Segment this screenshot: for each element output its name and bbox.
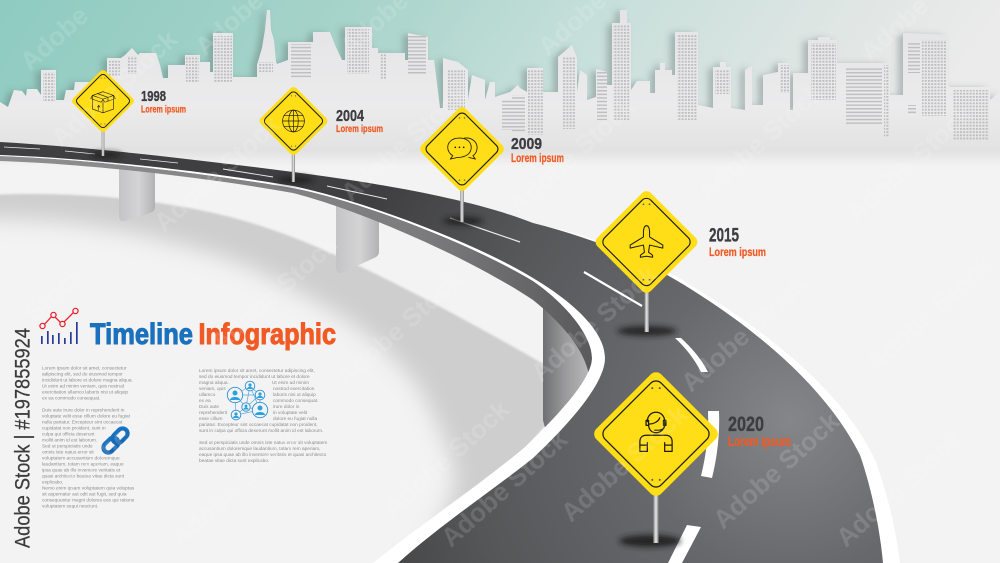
text column right: Sed ut perspiciatis unde omnis iste natus error sit voluptatem: [199, 440, 327, 446]
label 2004: 2004: [336, 108, 364, 125]
label 2009: [511, 136, 564, 165]
sign 1998: [71, 69, 135, 158]
text column right: magna aliqua.: [199, 380, 229, 386]
text column right: accusantium doloremque laudantium, totam rem aperiam,: [199, 446, 320, 452]
text column left: incididunt ut labore et dolore magna aliqua.: [42, 378, 133, 384]
road cast shadow on ground: [0, 194, 600, 563]
ground background: [0, 165, 1000, 563]
text column right: eaque ipsa quae ab illo inventore veritatis et quasi architecto: [199, 452, 327, 458]
watermarks: Adobe Stock: [55, 369, 193, 498]
text column left: ex ea commodo consequat.: [42, 396, 100, 402]
text column right: ullamco: [199, 392, 216, 398]
text column right: reprehenderit: [199, 410, 228, 416]
sign 2020: [591, 369, 721, 547]
watermarks: Adobe Stock: [525, 259, 663, 388]
text column right: commodo consequat.: [273, 398, 318, 404]
watermarks: Adobe Stock: [330, 264, 468, 393]
text column left: voluptatem accusantium doloremque: [42, 456, 120, 462]
text column right: Duis aute: [199, 404, 219, 410]
road underside: [0, 156, 592, 385]
text column left: Duis aute irure dolor in reprehenderit in: [42, 408, 125, 414]
watermarks: Adobe Stock: [435, 424, 573, 553]
text column left: Nemo enim ipsam voluptatem quia voluptas: [42, 486, 135, 492]
text column left: cupidatat non proident, sunt in: [42, 426, 106, 432]
text column left: consequuntur magni dolores eos qui ratione: [42, 498, 135, 504]
background sky: [0, 0, 1000, 170]
label 2015: 2015: [709, 226, 739, 246]
text column left: quasi architecto beatae vitae dicta sunt: [42, 474, 125, 480]
skyline base fade: [0, 140, 1000, 180]
text column left: nulla pariatur. Excepteur sint occaecat: [42, 420, 123, 426]
text column right: pariatur. Excepteur sint occaecat cupidatat non proident,: [199, 422, 318, 428]
label 2004: [336, 108, 383, 135]
road: [0, 142, 900, 563]
watermarks: Adobe Stock: [205, 229, 343, 358]
title: Timeline: [90, 318, 193, 351]
bridge pillar 1: [119, 166, 155, 221]
text column left: explicabo.: [42, 480, 63, 486]
title: Infographic: [198, 318, 336, 351]
watermarks: Adobe Stock: [675, 269, 813, 398]
watermarks: Adobe Stock: [148, 109, 286, 238]
stock credit vertical text: Adobe Stock | #197855924: [12, 328, 34, 548]
watermarks: Adobe Stock: [335, 79, 473, 208]
bridge pillar 2: [336, 200, 379, 273]
sign 2015: [593, 189, 700, 336]
text column right: ex ea: [199, 399, 211, 404]
sign 2009: [418, 105, 506, 226]
sign 2004: [258, 85, 329, 184]
text column right: [199, 368, 327, 464]
icon: chain link: [101, 426, 130, 455]
bridge pillar 3: [543, 296, 592, 432]
label 2015: Lorem ipsum: [709, 245, 766, 259]
icon: headset operator: [640, 412, 672, 451]
label 2020: [728, 413, 791, 449]
inner white edge: [0, 155, 605, 563]
text column left: exercitation ullamco laboris nisi ut aliquip: [42, 390, 128, 396]
watermarks: Adobe Stock: [503, 91, 641, 220]
icon: bar and line chart: [40, 308, 78, 344]
text column left: culpa qui officia deserunt: [42, 432, 95, 438]
text column right: dolore eu fugiat nulla: [273, 416, 317, 422]
label 1998: Lorem ipsum: [141, 104, 186, 116]
text column right: Lorem ipsum dolor sit amet, consectetur adipiscing elit,: [199, 368, 315, 374]
label 2004: Lorem ipsum: [336, 124, 383, 135]
text column right: esse cillum: [199, 416, 223, 422]
text column right: veniam, quis: [199, 386, 226, 392]
label 2020: Lorem ipsum: [728, 434, 791, 449]
label 1998: 1998: [141, 89, 166, 105]
label 2009: 2009: [511, 136, 542, 153]
text column left: Ut enim ad minim veniam, quis nostrud: [42, 384, 124, 390]
watermarks: Adobe Stock: [165, 424, 303, 553]
paper-cut city skyline: [0, 10, 1000, 172]
watermarks: Stock: [18, 258, 91, 328]
text column left: voluptatem sequi nesciunt.: [42, 504, 98, 510]
label 2020: 2020: [728, 413, 764, 436]
watermarks: Adobe Stock: [45, 24, 183, 153]
text column left: mollit anim id est laborum.: [42, 438, 97, 444]
asphalt surface: [0, 142, 883, 563]
icon: people network: [227, 381, 268, 420]
lane dashes: [4, 147, 642, 306]
text column right: irure dolor in: [273, 404, 300, 410]
text column right: sunt in culpa qui officia deserunt mollit anim id est laborum.: [199, 428, 323, 434]
watermarks: Adobe Stock: [707, 406, 845, 535]
text column left: Lorem ipsum dolor sit amet, consectetur: [42, 366, 127, 372]
icon: box: [91, 92, 115, 113]
text column left: Sed ut perspiciatis unde: [42, 444, 93, 450]
title: [90, 318, 336, 351]
icon: globe: [283, 110, 304, 132]
text column left: sit aspernatur aut odit aut fugit, sed quia: [42, 492, 127, 498]
icon: chat bubbles: [448, 138, 477, 159]
text column left: ipsa quae ab illo inventore veritatis et: [42, 468, 121, 474]
text column right: Ut enim ad minim: [272, 380, 309, 386]
text column right: laboris nisi ut aliquip: [273, 392, 316, 398]
label 2009: Lorem ipsum: [511, 153, 564, 165]
icon: airplane: [630, 226, 663, 257]
text column right: in voluptate velit: [273, 410, 308, 416]
label 2015: [709, 226, 766, 259]
outer white edge: [533, 223, 900, 563]
text column right: nostrud exercitation: [273, 386, 315, 392]
watermarks: Adobe Stock: [840, 99, 978, 228]
text column right: beatae vitae dicta sunt explicabo.: [199, 458, 269, 464]
text column left: omnis iste natus error sit: [42, 450, 94, 456]
text column left: [42, 366, 135, 510]
watermarks: Adobe: [14, 0, 94, 77]
text column right: sed do eiusmod tempor incididunt ut labore et dolore: [199, 374, 310, 380]
label 1998: [141, 89, 186, 116]
text column left: laudantium, totam rem aperiam, eaque: [42, 462, 124, 468]
watermarks: Adobe Stock: [555, 399, 693, 528]
text column left: voluptate velit esse cillum dolore eu fugiat: [42, 414, 131, 420]
watermarks: Adobe Stock: [691, 77, 829, 206]
watermarks: Adobe Stock: [377, 394, 515, 523]
watermarks: Adobe Stock: [860, 249, 998, 378]
text column left: adipiscing elit, sed do eiusmod tempor: [42, 372, 123, 378]
watermarks: Adobe Stock: [830, 424, 968, 553]
